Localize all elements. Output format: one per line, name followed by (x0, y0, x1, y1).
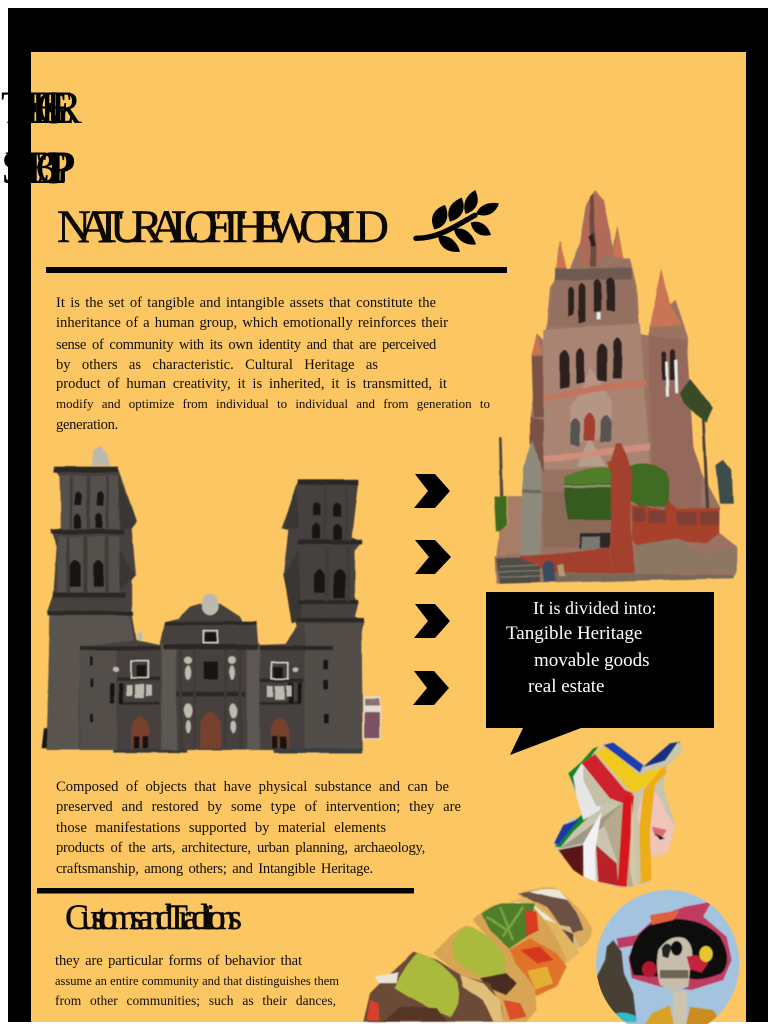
text: assume an entire community and that distinguishes them (55, 974, 339, 988)
text: real estate (528, 676, 604, 697)
arrow chevron 4 (413, 671, 449, 705)
overlapping title line 2: SHEEBGPP (1, 142, 76, 194)
photo: Puebla cathedral (42, 445, 381, 753)
arrow chevron 2 (415, 540, 451, 574)
text: by others as characteristic. Cultural Heritage as (56, 357, 378, 373)
arrow chevron 3 (414, 604, 450, 638)
text: preserved and restored by some type of intervention; they are (56, 799, 461, 815)
heading: natural of the world: NATURAL OF THE WORLD (57, 201, 389, 253)
text: those manifestations supported by material elements (56, 820, 386, 836)
text: sense of community with its own identity and that are perceived (56, 337, 436, 353)
text: Tangible Heritage (506, 623, 642, 644)
text: craftsmanship, among others; and Intangible Heritage. (56, 861, 373, 877)
rule under heading (46, 267, 507, 273)
text block: tangible heritage description (56, 779, 461, 877)
text: Composed of objects that have physical substance and can be (56, 779, 449, 795)
icon: leaf branch (416, 190, 499, 252)
text block: heritage definition (56, 295, 490, 433)
photo: San Miguel parish church (494, 190, 737, 583)
text: movable goods (534, 650, 650, 671)
text: product of human creativity, it is inherited, it is transmitted, it (56, 376, 447, 392)
overlapping title line 1: THEHEGER (1, 82, 83, 134)
sub-element: palm tree (702, 420, 709, 508)
text: from other communities; such as their dances, (55, 993, 336, 1008)
rule above customs section (37, 888, 414, 894)
text block: divided into (506, 598, 656, 697)
heading: customs and traditions: Customs and Traditions (65, 897, 242, 937)
text block: customs description (55, 953, 339, 1008)
photo: tacos (363, 887, 592, 1022)
photo: catrina skeleton (596, 890, 740, 1024)
photo: ribbon hat mask (553, 741, 683, 887)
text: It is divided into: (533, 598, 656, 618)
sub-element: stone gate tower (520, 440, 542, 555)
text: It is the set of tangible and intangible assets that constitute the (56, 295, 436, 311)
text: they are particular forms of behavior that (55, 953, 302, 969)
text: modify and optimize from individual to individual and from generation to (56, 396, 490, 411)
text: generation. (56, 417, 118, 433)
text: products of the arts, architecture, urban planning, archaeology, (56, 840, 425, 856)
arrow chevron 1 (414, 474, 450, 508)
text: inheritance of a human group, which emotionally reinforces their (56, 315, 448, 331)
speech bubble (486, 592, 714, 755)
